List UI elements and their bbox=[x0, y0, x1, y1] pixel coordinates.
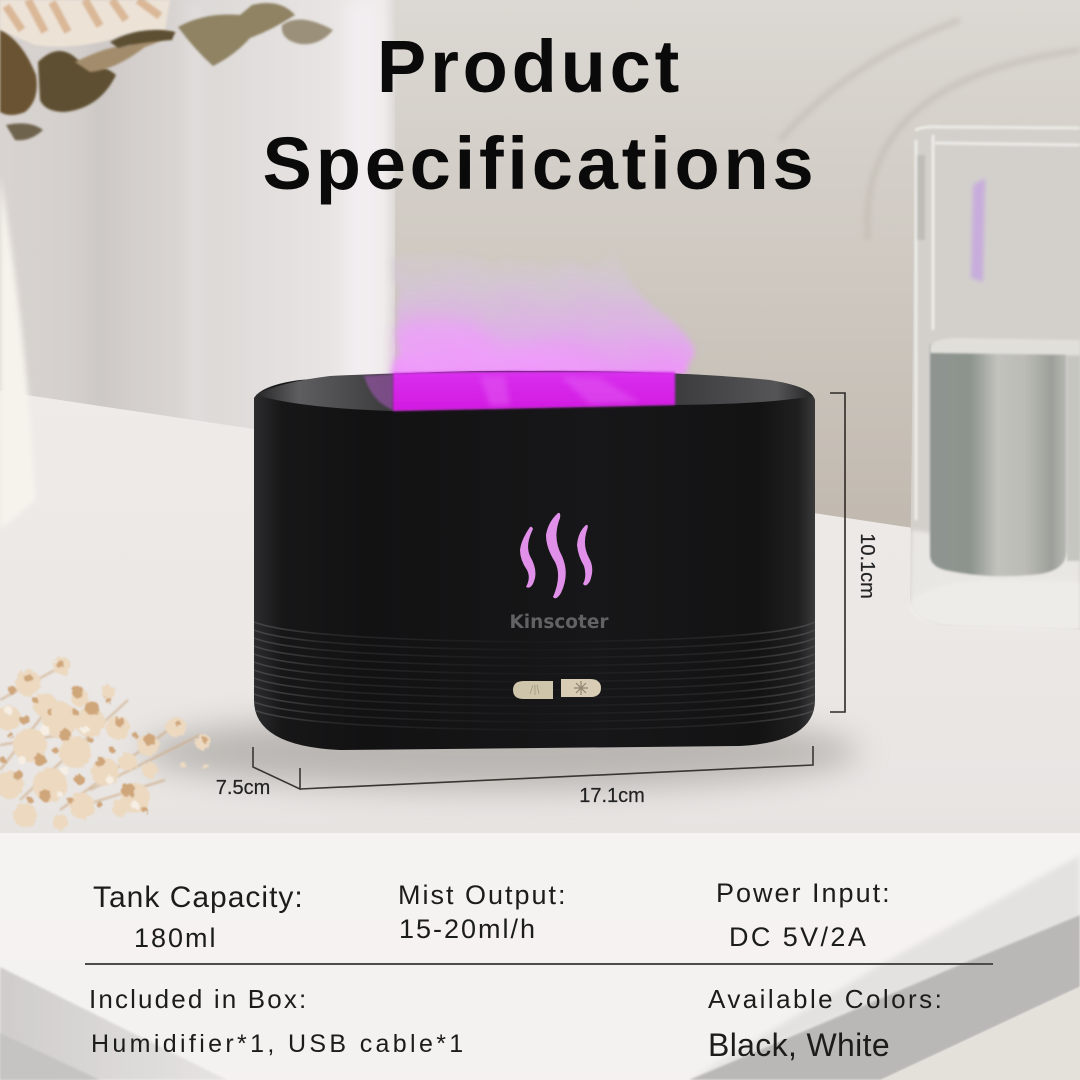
title bbox=[263, 25, 817, 205]
spec: included in box bbox=[89, 984, 467, 1058]
spec: mist output: Mist Output: bbox=[398, 880, 568, 910]
spec: power input bbox=[716, 878, 892, 952]
table edge shadow, lower left bbox=[0, 967, 227, 1080]
background: table surface bbox=[0, 391, 1080, 1080]
spec: included in box: Included in Box: bbox=[89, 984, 308, 1014]
table edge shadow, lower right bbox=[689, 855, 1080, 1080]
spec: mist output: 15-20ml/h bbox=[399, 914, 537, 944]
icon: flame logo bbox=[520, 513, 592, 598]
flower stems bbox=[0, 670, 200, 810]
dimension: width 17.1cm bbox=[300, 746, 813, 807]
humidifier bbox=[254, 371, 815, 750]
top opening bbox=[256, 372, 813, 411]
dimension: depth 7.5cm: 7.5cm bbox=[216, 777, 270, 799]
water bbox=[930, 345, 1066, 576]
panel: specifications strip bbox=[0, 833, 1080, 1080]
spec: tank capacity bbox=[93, 881, 304, 953]
spec: tank capacity: Tank Capacity: bbox=[93, 881, 304, 914]
spec: available colors: Available Colors: bbox=[708, 984, 944, 1014]
glass body bbox=[910, 128, 1080, 630]
dimension: depth 7.5cm bbox=[216, 747, 300, 799]
humidifier body bbox=[254, 371, 815, 750]
spec: available colors: Black, White bbox=[708, 1027, 890, 1063]
background: curtain bbox=[0, 0, 395, 460]
spec: mist output bbox=[398, 880, 568, 944]
background: table shadow bbox=[140, 714, 860, 790]
title: Specifications bbox=[263, 122, 817, 205]
spec: power input: DC 5V/2A bbox=[729, 922, 868, 952]
background: wall bbox=[0, 0, 1080, 600]
purple reflection bbox=[971, 178, 985, 282]
flower blossoms bbox=[0, 657, 211, 830]
dried flowers, lower left bbox=[0, 657, 211, 830]
button: mist bbox=[513, 681, 553, 699]
mist flame bbox=[396, 242, 692, 382]
dimension: height 10.1cm: 10.1cm bbox=[856, 533, 878, 599]
dried leaves, top left bbox=[0, 0, 333, 140]
title: Product bbox=[377, 25, 683, 108]
button: light bbox=[561, 679, 601, 697]
glass of water bbox=[908, 127, 1080, 630]
brand name: Kinscoter bbox=[509, 612, 609, 633]
glass base bbox=[908, 580, 1080, 630]
spec: available colors bbox=[708, 984, 944, 1063]
flower bunch at top bbox=[0, 0, 170, 47]
glass walls bbox=[915, 127, 1080, 520]
spec: included in box: Humidifier*1, USB cable*1 bbox=[91, 1030, 467, 1058]
flame glow in opening bbox=[364, 371, 675, 411]
water surface bbox=[930, 338, 1080, 355]
background: vase at left edge bbox=[0, 175, 36, 530]
background: plant stem shadow bbox=[780, 20, 1080, 240]
spec: power input: Power Input: bbox=[716, 878, 892, 908]
ribbed base bbox=[254, 622, 815, 730]
dimension: width 17.1cm: 17.1cm bbox=[579, 785, 645, 807]
dimension: height 10.1cm bbox=[830, 393, 878, 712]
background: curtain folds bbox=[90, 0, 381, 440]
spec: tank capacity: 180ml bbox=[134, 923, 218, 953]
